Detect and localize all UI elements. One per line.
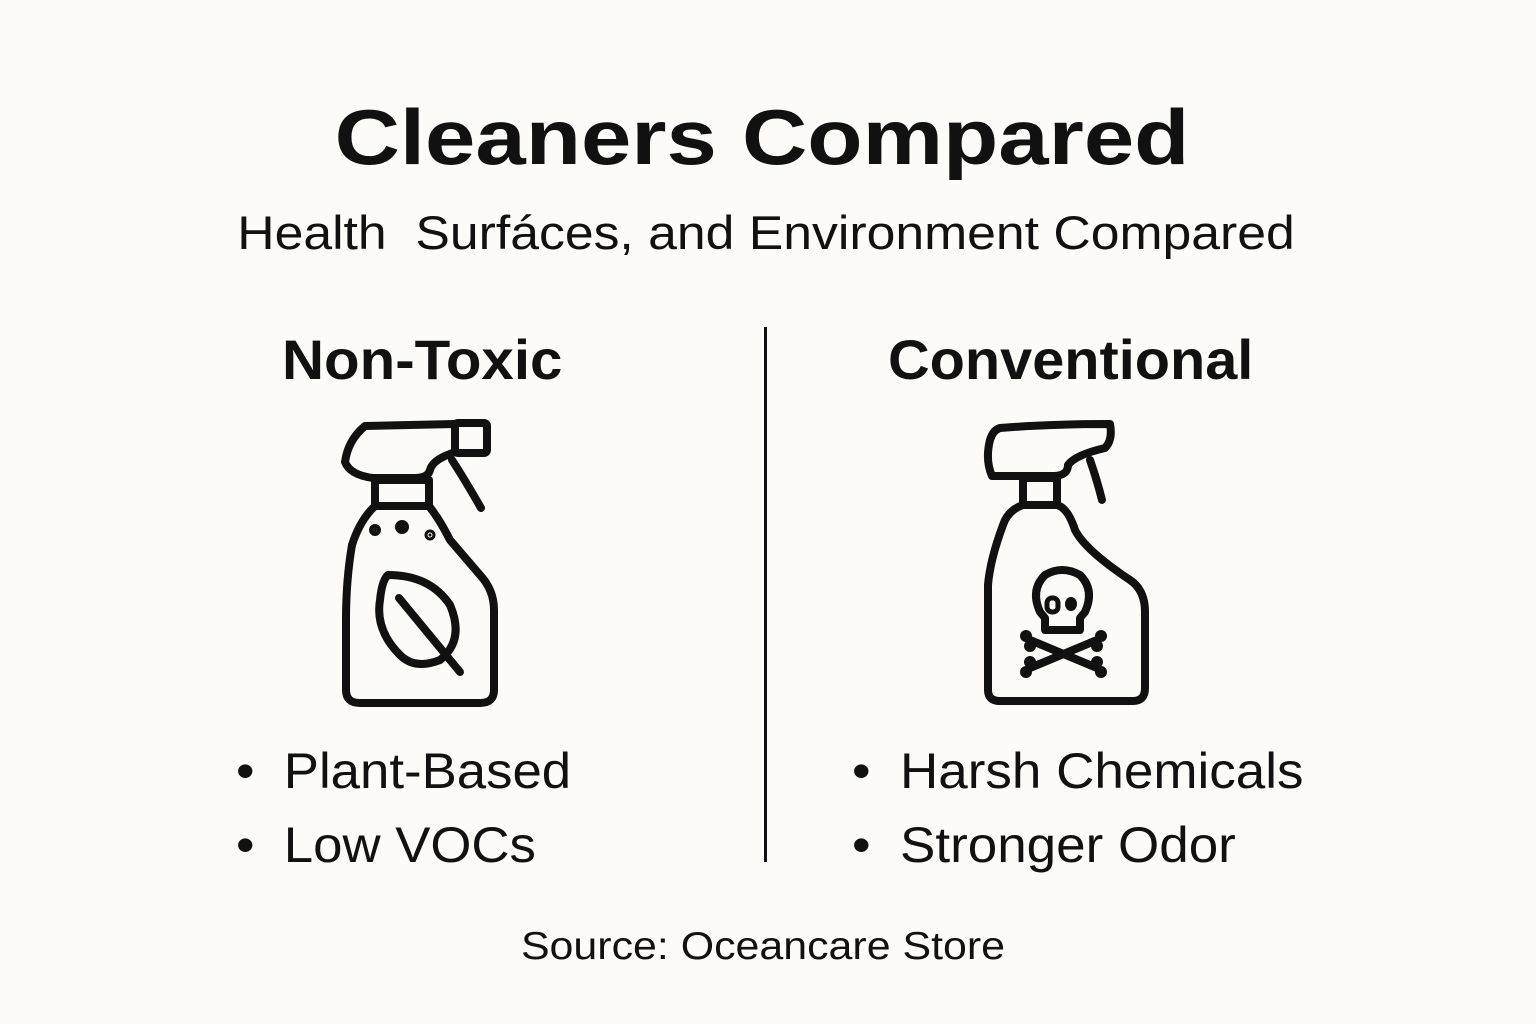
heading: non-toxic: Non-Toxic: [282, 328, 562, 391]
bullets: conventional: • Stronger Odor: [852, 817, 1236, 873]
title: Cleaners Compared: [335, 93, 1189, 181]
divider: [764, 327, 767, 862]
bullets: conventional: • Harsh Chemicals: [852, 743, 1304, 799]
subtitle: Health Surfáces, and Environment Compared: [237, 206, 1295, 259]
heading: conventional: Conventional: [888, 328, 1253, 391]
source: Source: Oceancare Store: [521, 925, 1005, 968]
bullets: non-toxic: [236, 743, 571, 873]
bullets: non-toxic: • Low VOCs: [236, 817, 536, 873]
bullets: conventional: [852, 743, 1304, 873]
bullets: non-toxic: • Plant-Based: [236, 743, 571, 799]
